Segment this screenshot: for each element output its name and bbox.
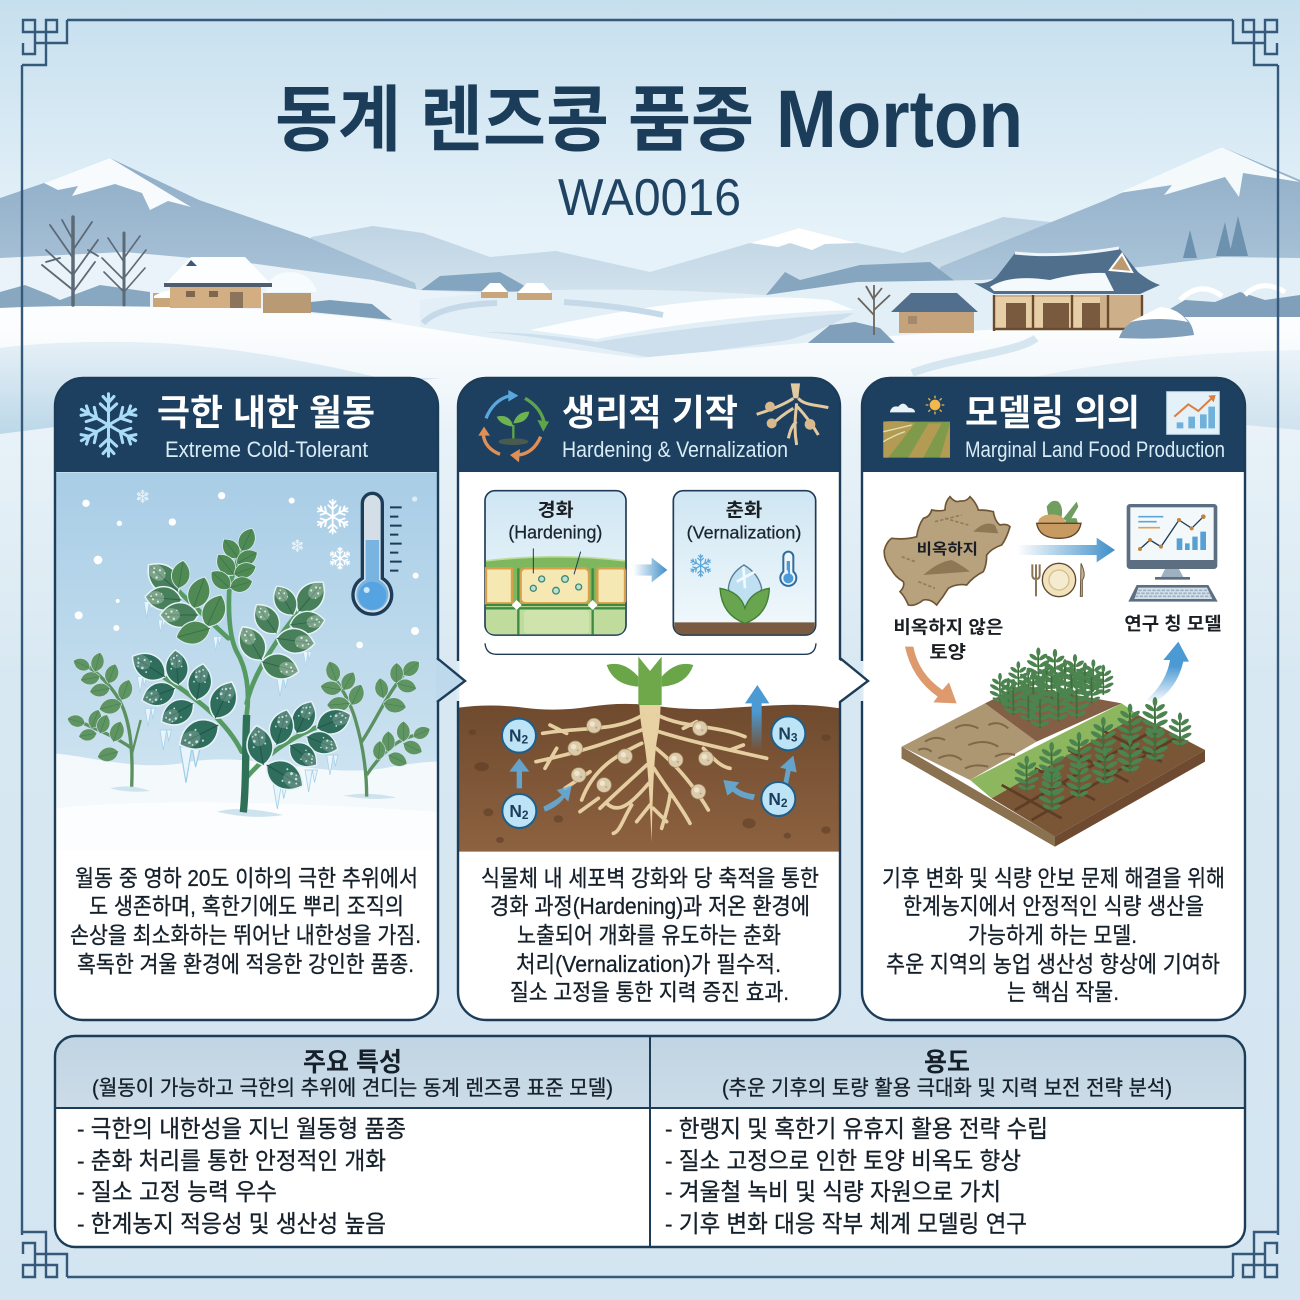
label research model: 연구 칭 모델 — [1124, 614, 1222, 634]
right small tree — [858, 285, 890, 335]
header icon: growth chart — [1167, 392, 1219, 434]
panel 2 description: 경화 과정(Hardening)과 저온 환경에 — [490, 893, 810, 919]
panel 3 outline — [862, 378, 1245, 1020]
bracket — [485, 643, 816, 654]
icon: plate and cutlery — [1032, 563, 1084, 597]
panel 1 outline — [55, 378, 438, 1020]
panel 2 header bar — [458, 378, 840, 472]
curved arrow from field — [1147, 642, 1189, 703]
N2 markers: N — [509, 801, 522, 821]
right small plant — [319, 657, 432, 797]
label poor soil — [893, 617, 1003, 662]
summary table — [55, 1036, 1245, 1247]
icon: growth cycle — [478, 390, 549, 462]
table column: key traits: - 극한의 내한성을 지닌 월동형 품종 — [77, 1116, 406, 1143]
N2 markers: 2 — [781, 796, 788, 810]
panel 1 heading: 극한 내한 월동 — [157, 392, 375, 433]
panel 2 description: 식물체 내 세포벽 강화와 당 축적을 통한 — [481, 865, 819, 891]
panel 1 description — [70, 865, 421, 977]
panel 2 description: 질소 고정을 통한 지력 증진 효과. — [510, 979, 789, 1005]
flow arrow to model — [1017, 538, 1115, 562]
table column: key traits: 주요 특성 — [303, 1047, 402, 1077]
curved arrow to field — [905, 647, 957, 703]
N2 markers: 3 — [791, 730, 798, 744]
vernalization box — [673, 491, 816, 635]
icon: food bowl — [1037, 501, 1081, 538]
N2 markers: N — [509, 726, 522, 746]
box label vernalization — [687, 500, 801, 542]
header icon: field and sun — [883, 396, 950, 458]
panel 1 description: 혹독한 겨울 환경에 적응한 강인한 품종. — [77, 951, 414, 977]
panel 3 header bar — [862, 378, 1245, 472]
icon: computer model — [1127, 504, 1218, 602]
title: Morton — [776, 74, 1023, 165]
N2 markers: 2 — [522, 733, 529, 747]
panel 1 illustration — [55, 472, 438, 851]
box label hardening — [508, 500, 602, 542]
panel 2 outline — [458, 378, 840, 1020]
box label vernalization: 춘화 — [726, 500, 762, 521]
main frosted plant — [126, 525, 355, 812]
N2 markers: 2 — [522, 808, 529, 822]
panel 2 description: 노출되어 개화를 유도하는 춘화 — [517, 922, 781, 948]
dense lentil crop — [989, 647, 1114, 728]
title: 동계 렌즈콩 품종 — [275, 81, 754, 161]
panel 2 subheading: Hardening & Vernalization — [562, 437, 788, 462]
panel 2 description: 처리(Vernalization)가 필수적. — [516, 951, 781, 977]
distant cottages — [481, 283, 552, 300]
table column: uses: (추운 기후의 토량 활용 극대화 및 지력 보전 전략 분석) — [722, 1077, 1172, 1100]
panel 3 description: 기후 변화 및 식량 안보 문제 해결을 위해 — [882, 865, 1225, 891]
arrow: panel 2 to panel 3 — [838, 658, 868, 702]
label barren land: 비옥하지 — [917, 541, 978, 558]
N2 markers: N — [778, 723, 791, 743]
table column: uses — [665, 1047, 1172, 1238]
box label hardening: 경화 — [538, 500, 574, 521]
icon: snowflake — [77, 394, 140, 456]
panel: extreme cold tolerance — [55, 378, 438, 1020]
table column: uses: - 겨울철 녹비 및 식량 자원으로 가치 — [665, 1179, 1001, 1206]
nitrogen arrows — [509, 685, 797, 812]
hanok — [974, 248, 1160, 331]
panel: modelling significance — [862, 378, 1245, 1020]
table column: uses: - 질소 고정으로 인한 토양 비옥도 향상 — [665, 1148, 1021, 1175]
panel 2 illustration — [459, 491, 841, 852]
N2 markers — [502, 716, 805, 828]
table column: uses: - 한랭지 및 혹한기 유휴지 활용 전략 수립 — [665, 1116, 1048, 1143]
label poor soil: 토양 — [929, 642, 966, 662]
panel 1 description: 도 생존하며, 혹한기에도 뿌리 조직의 — [89, 893, 404, 919]
hardening box — [485, 491, 626, 635]
panel 1 subheading: Extreme Cold-Tolerant — [165, 437, 368, 462]
panel 3 illustration — [883, 392, 1222, 847]
panel 3 description — [882, 865, 1225, 1005]
box label hardening: (Hardening) — [508, 521, 602, 542]
barren land map — [884, 497, 1010, 605]
panel 3 subheading: Marginal Land Food Production — [965, 437, 1225, 462]
panel 3 description: 추운 지역의 농업 생산성 향상에 기여하 — [886, 951, 1220, 977]
small house — [891, 293, 978, 333]
panel 1 header bar — [55, 378, 438, 472]
table column: key traits — [77, 1047, 613, 1238]
panel: physiological mechanism — [458, 378, 841, 1020]
soil — [459, 704, 841, 852]
left small plant — [66, 651, 141, 787]
table column: uses: 용도 — [924, 1047, 970, 1077]
table column: uses: - 기후 변화 대응 작부 체계 모델링 연구 — [665, 1211, 1027, 1238]
table column: key traits: - 춘화 처리를 통한 안정적인 개화 — [77, 1148, 386, 1175]
table column: key traits: (월동이 가능하고 극한의 추위에 견디는 동계 렌즈콩 표준 모델) — [92, 1077, 613, 1100]
snow mound — [1119, 309, 1194, 339]
winter landscape scene — [0, 147, 1300, 440]
row crops — [1014, 697, 1192, 812]
panel 3 description: 가능하게 하는 모델. — [968, 922, 1137, 948]
subtitle: WA0016 — [558, 169, 741, 227]
table column: key traits: - 질소 고정 능력 우수 — [77, 1179, 277, 1206]
title — [275, 74, 1023, 165]
icon: root nodules — [757, 383, 828, 445]
roots and nodules — [536, 705, 767, 842]
icicles — [137, 602, 338, 809]
panel 3 heading: 모델링 의의 — [965, 392, 1140, 433]
left farmhouse — [153, 257, 317, 313]
table column: key traits: - 한계농지 적응성 및 생산성 높음 — [77, 1211, 386, 1238]
panel 1 description: 손상을 최소화하는 뛰어난 내한성을 가짐. — [70, 922, 421, 948]
panel 3 description: 한계농지에서 안정적인 식량 생산을 — [903, 893, 1204, 919]
arrow hardening to vernalization — [633, 558, 667, 582]
N2 markers: N — [768, 789, 781, 809]
arrow: panel 1 to panel 2 — [436, 658, 465, 702]
left trees — [42, 217, 146, 305]
isometric field — [902, 647, 1205, 847]
label poor soil: 비옥하지 않은 — [893, 617, 1003, 637]
sprout — [607, 657, 693, 705]
panel 1 description: 월동 중 영하 20도 이하의 극한 추위에서 — [75, 865, 418, 891]
box label vernalization: (Vernalization) — [687, 522, 801, 542]
panel 3 description: 는 핵심 작물. — [1007, 979, 1119, 1005]
panel 2 heading: 생리적 기작 — [562, 392, 738, 433]
thermometer — [353, 493, 402, 614]
panel 2 description — [481, 865, 819, 1005]
